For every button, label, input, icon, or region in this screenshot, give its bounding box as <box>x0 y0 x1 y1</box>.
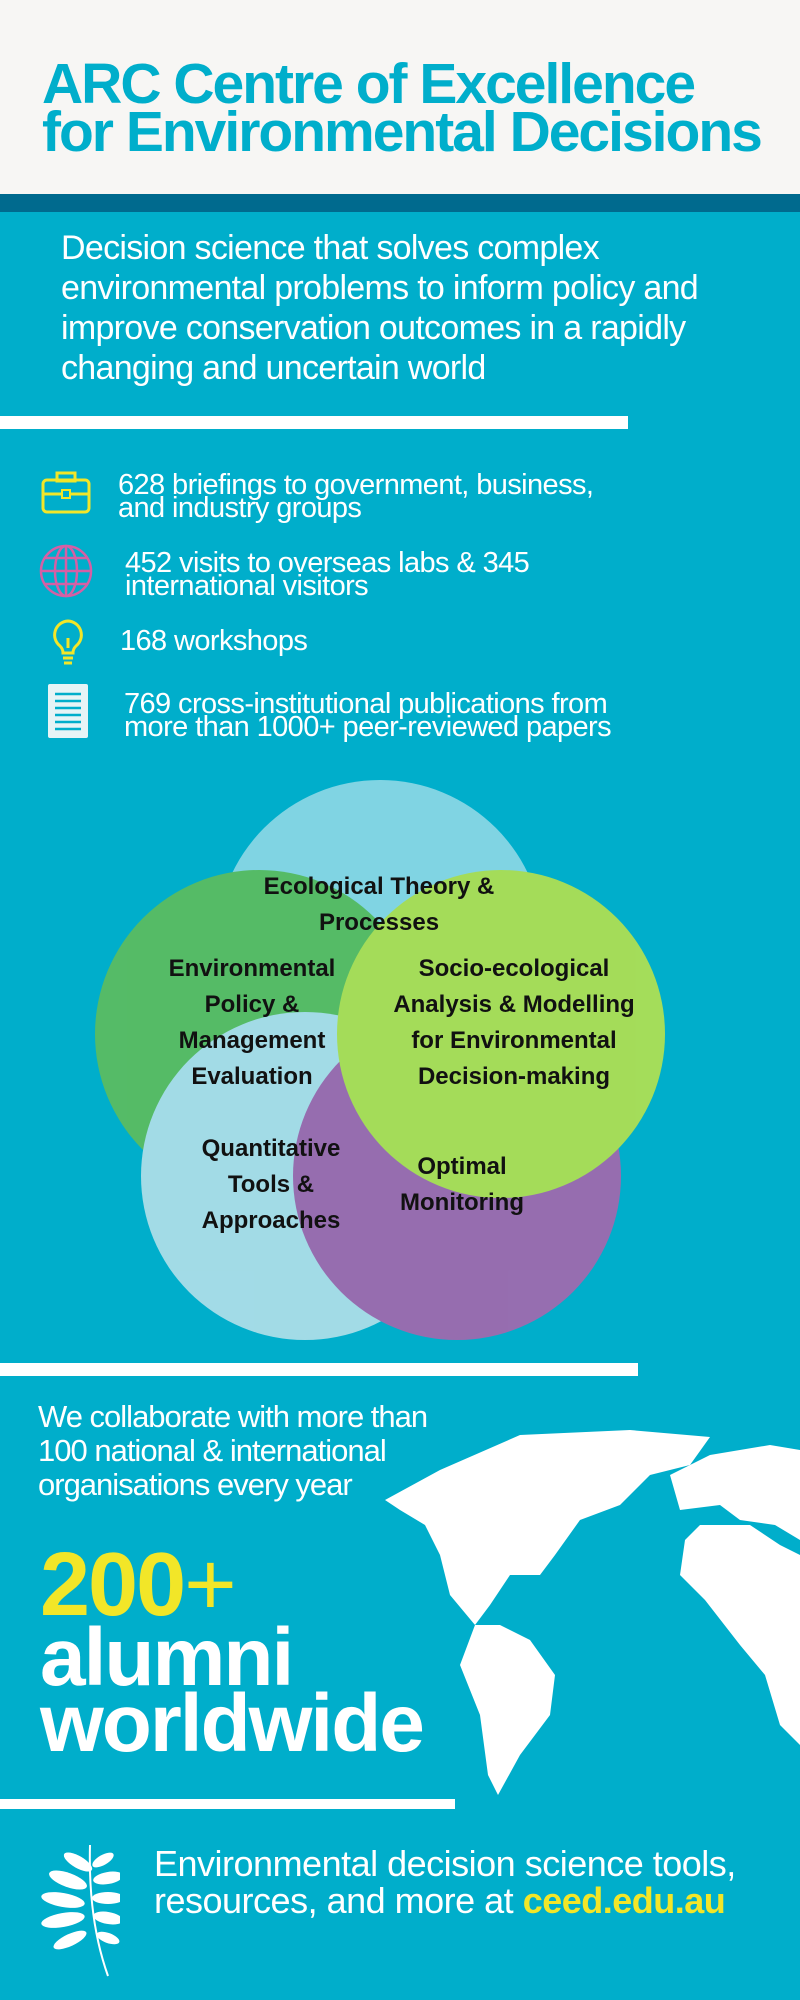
venn diagram: Evaluation <box>191 1063 313 1090</box>
header <box>0 0 800 194</box>
stat: publications <box>124 688 611 743</box>
venn diagram: Optimal <box>417 1153 507 1180</box>
venn diagram: for Environmental <box>411 1027 617 1054</box>
title <box>42 52 761 164</box>
icon: document <box>48 684 88 738</box>
icon: lightbulb <box>53 620 83 664</box>
stat: visits <box>125 547 529 602</box>
venn diagram: Socio-ecological <box>419 955 609 982</box>
alumni stat: 200+ <box>40 1535 235 1635</box>
alumni stat: alumni <box>40 1612 292 1703</box>
stat: publications: more than 1000+ peer-reviewed papers <box>124 711 611 743</box>
title: ARC Centre of Excellence <box>42 52 694 116</box>
venn diagram: Policy & <box>205 991 299 1018</box>
intro text: Decision science that solves complex environmental problems to inform policy and improve conservation outcomes in a rapidly changing and uncertain world <box>61 229 698 387</box>
venn diagram: Tools & <box>228 1171 314 1198</box>
stat: visits: international visitors <box>125 570 368 602</box>
stat: briefings <box>118 469 593 524</box>
venn diagram: Processes <box>319 909 439 936</box>
title: for Environmental Decisions <box>42 100 761 164</box>
world map <box>385 1430 800 1795</box>
header stripe <box>0 194 800 212</box>
stat: briefings: and industry groups <box>118 492 361 524</box>
stat: briefings: 628 briefings to government, business, <box>118 469 593 501</box>
venn diagram: Environmental <box>169 955 335 982</box>
venn diagram: Quantitative <box>202 1135 340 1162</box>
venn diagram: Analysis & Modelling <box>393 991 635 1018</box>
collaboration text: 100 national & international <box>38 1433 386 1468</box>
venn diagram <box>95 780 665 1340</box>
collaboration text: organisations every year <box>38 1467 352 1502</box>
icon: globe <box>40 544 92 598</box>
venn diagram: Monitoring <box>400 1189 524 1216</box>
stat: visits: 452 visits to overseas labs & 345 <box>125 547 529 579</box>
venn diagram: Decision-making <box>418 1063 610 1090</box>
venn diagram: Ecological Theory & <box>264 873 494 900</box>
icon: briefcase <box>42 472 90 514</box>
venn diagram: Approaches <box>202 1207 340 1234</box>
footer text: resources, and more at ceed.edu.au <box>154 1880 725 1921</box>
collaboration text <box>38 1399 427 1502</box>
stat: publications: 769 cross-institutional publications from <box>124 688 607 720</box>
collaboration text: We collaborate with more than <box>38 1399 427 1434</box>
stat: workshops: 168 workshops <box>120 625 307 657</box>
footer text: Environmental decision science tools, <box>154 1843 736 1884</box>
stats list <box>40 469 611 743</box>
venn diagram: Management <box>179 1027 325 1054</box>
alumni stat: worldwide <box>40 1678 423 1769</box>
footer text <box>154 1843 736 1921</box>
alumni stat <box>40 1535 423 1769</box>
icon: leaf <box>41 1845 120 1976</box>
